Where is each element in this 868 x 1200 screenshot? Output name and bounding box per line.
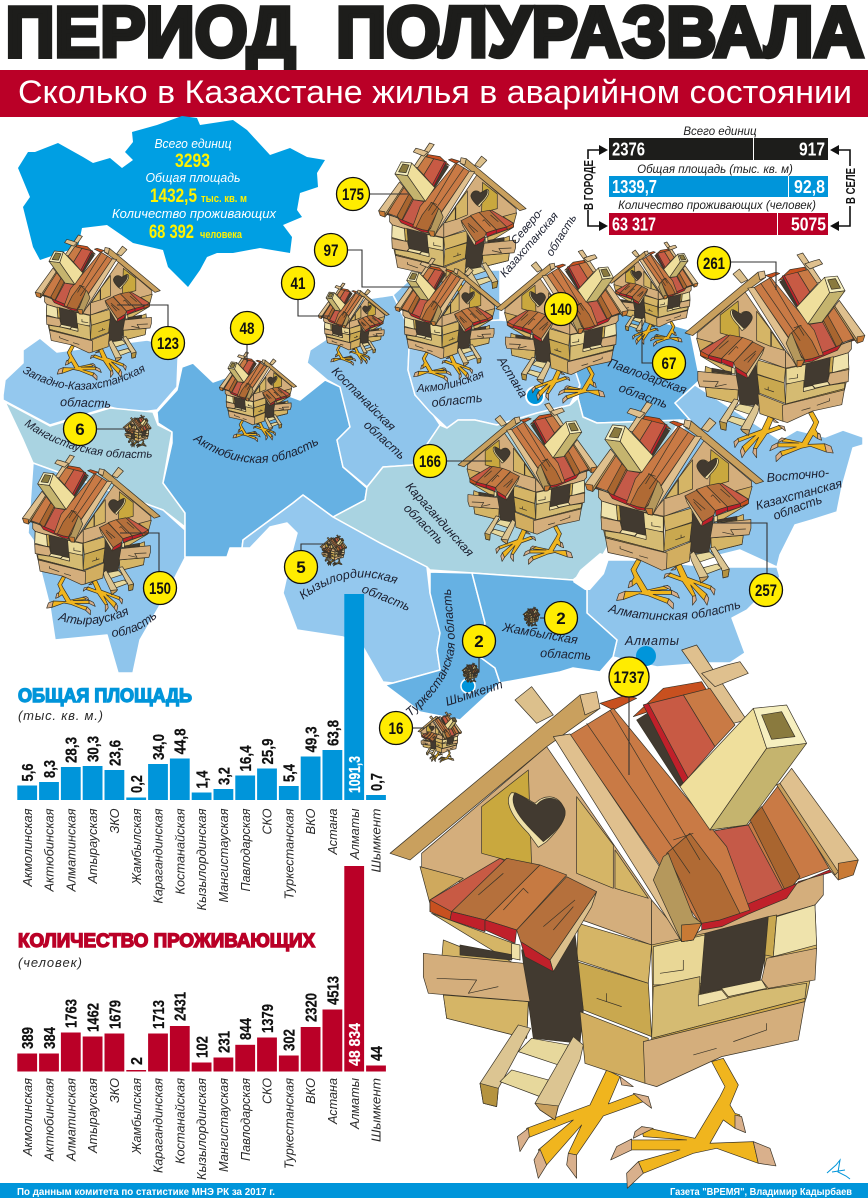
house: Mangystau 6 <box>64 412 151 448</box>
map labels: область <box>360 582 412 614</box>
values: residents: 231 <box>216 1031 233 1053</box>
house: Kostanay 41 <box>282 266 389 365</box>
heading: total area: ОБЩАЯ ПЛОЩАДЬ <box>18 686 192 707</box>
values: total area: 34,0 <box>151 734 168 760</box>
panel: national totals on blue map: 1432,5 <box>150 186 197 207</box>
values: residents: 1679 <box>107 1000 124 1029</box>
region labels: residents: Акмолинская <box>20 1078 35 1157</box>
house: Astana 140 <box>496 250 628 403</box>
region labels: residents <box>20 1078 384 1180</box>
panel: city vs village table: 92,8 <box>794 177 825 197</box>
panel: city vs village table: 63 317 <box>612 214 656 234</box>
region labels: total area: Костанайская <box>172 808 187 894</box>
values: total area <box>20 720 386 793</box>
house: Shymkent 16: 16 <box>388 719 404 738</box>
panel: city vs village table: 5075 <box>791 214 826 234</box>
values: residents: 2 <box>129 1057 146 1065</box>
house: Astana 140: 140 <box>550 300 572 319</box>
panel: national totals on blue map: Общая площадь <box>146 170 241 185</box>
icon: artist signature <box>827 1160 850 1179</box>
values: total area: 3,2 <box>216 767 233 785</box>
arrows: in village: В СЕЛЕ <box>843 168 858 204</box>
map labels: область <box>361 418 408 462</box>
values: residents: 4513 <box>325 976 342 1005</box>
region labels: residents: Туркестанская <box>281 1078 296 1169</box>
values: total area: 63,8 <box>325 720 342 746</box>
values: total area: 5,4 <box>282 764 299 782</box>
map labels: Астана <box>494 353 530 400</box>
region labels: total area: Павлодарская <box>238 808 253 892</box>
values: total area: 49,3 <box>304 726 320 752</box>
heading: residents: КОЛИЧЕСТВО ПРОЖИВАЮЩИХ <box>18 931 315 952</box>
panel: national totals on blue map: Всего единиц <box>154 136 232 151</box>
house: Pavlodar 67: 67 <box>662 354 676 373</box>
subtitle banner: Сколько в Казахстане жилья в аварийном состоянии <box>18 74 852 110</box>
map labels: Западно-Казахстанская <box>23 366 145 390</box>
marker: Shymkent <box>461 679 475 693</box>
panel: city vs village table: Общая площадь (тыс. кв. м) <box>637 164 793 176</box>
map labels: Жамбылская <box>500 620 579 647</box>
house: North Kazakhstan 175 <box>336 143 526 314</box>
values: residents: 1462 <box>86 1003 102 1032</box>
unit: total area: (тыс. кв. м.) <box>18 708 103 723</box>
region labels: residents: Шымкент <box>369 1078 384 1142</box>
panel: national totals on blue map: 68 392 <box>149 222 194 243</box>
map labels: Мангистауская область <box>24 420 152 458</box>
region labels: residents: ВКО <box>303 1078 318 1104</box>
region labels: total area: ЗКО <box>107 808 122 834</box>
panel: city vs village table <box>581 126 858 235</box>
house: Karaganda 166 <box>414 403 597 564</box>
values: residents: 1763 <box>64 999 81 1028</box>
map labels: Костанайская <box>329 364 399 434</box>
map labels: Актюбинская область <box>192 436 318 464</box>
region labels: total area: Актюбинская <box>42 808 57 892</box>
panel: national totals on blue map <box>18 116 325 287</box>
region labels: total area: Кызылординская <box>194 808 209 910</box>
values: residents: 2431 <box>173 992 190 1021</box>
house: Almaty region 257: 257 <box>755 581 777 600</box>
region labels: residents: Атырауская <box>85 1078 100 1154</box>
values: residents: 1713 <box>151 1000 168 1029</box>
values: residents: 44 <box>369 1046 386 1061</box>
house: Akmola 97 <box>314 234 502 382</box>
house: Kyzylorda 5 <box>284 535 347 584</box>
title <box>6 0 864 72</box>
region labels: total area <box>20 808 384 910</box>
values: residents: 48 834 <box>347 1023 364 1066</box>
footer bar: По данным комитета по статистике МНЭ РК за 2017 г. <box>17 1186 275 1198</box>
values: total area: 1091,3 <box>347 756 364 793</box>
house: West Kazakhstan 123: 123 <box>157 334 179 353</box>
map labels: область <box>431 391 483 410</box>
house: Pavlodar 67 <box>608 242 698 380</box>
values: residents: 384 <box>42 1027 59 1049</box>
region labels: total area: СКО <box>260 808 275 834</box>
house: East Kazakhstan 261 <box>685 246 865 462</box>
region labels: residents: Карагандинская <box>151 1078 166 1173</box>
house: Aktobe 48: 48 <box>240 319 254 338</box>
panel: city vs village table: Количество проживающих (человек) <box>618 200 816 212</box>
values: residents: 1379 <box>260 1004 277 1033</box>
panel: city vs village table: 917 <box>799 140 825 160</box>
region labels: total area: Карагандинская <box>151 808 166 904</box>
map labels: область <box>60 395 111 411</box>
bars: residents <box>17 866 386 1072</box>
region labels: total area: Алматинская <box>63 808 78 892</box>
panel: city vs village table: 1339,7 <box>612 177 657 197</box>
arrows: in city: В ГОРОДЕ <box>581 160 596 210</box>
values: total area: 25,9 <box>260 738 277 764</box>
values: total area: 5,6 <box>20 763 37 782</box>
house: Akmola 97: 97 <box>324 241 338 260</box>
house: Turkestan 2: 2 <box>474 632 484 651</box>
map labels: Акмолинская <box>416 371 484 392</box>
map labels: Туркестанская область <box>406 590 455 716</box>
region labels: residents: Костанайская <box>172 1078 187 1164</box>
values: total area: 0,2 <box>129 775 146 793</box>
region labels: total area: Алматы <box>347 808 362 860</box>
map labels: Кызылординская <box>300 568 398 600</box>
panel: national totals on blue map: тыс. кв. м <box>201 193 247 205</box>
region labels: total area: Туркестанская <box>281 808 296 900</box>
values: residents <box>20 976 386 1066</box>
region labels: residents: Алматинская <box>63 1078 78 1162</box>
map labels: Атырауская <box>58 608 128 627</box>
house: Mangystau 6: 6 <box>75 420 85 439</box>
values: total area: 28,3 <box>64 737 81 763</box>
map labels: Алматинская область <box>608 602 740 620</box>
values: residents: 302 <box>282 1029 299 1051</box>
map of Kazakhstan regions <box>3 270 863 720</box>
map labels: Восточно- <box>766 466 830 485</box>
house: Kyzylorda 5: 5 <box>296 558 306 577</box>
region labels: residents: Алматы <box>347 1078 362 1130</box>
panel: city vs village table: Всего единиц <box>683 126 757 138</box>
house: West Kazakhstan 123 <box>35 235 185 380</box>
panel: national totals on blue map: человека <box>200 229 243 241</box>
house: Atyrau 150 <box>22 455 176 615</box>
region labels: total area: Акмолинская <box>20 808 35 887</box>
region labels: total area: ВКО <box>303 808 318 834</box>
map labels <box>23 206 844 760</box>
map labels: Шымкент <box>444 677 504 709</box>
values: total area: 0,7 <box>369 773 386 791</box>
region labels: total area: Мангистауская <box>216 808 231 902</box>
region labels: residents: Астана <box>325 1078 340 1125</box>
footer bar <box>0 1183 868 1198</box>
map labels: область <box>544 212 579 259</box>
region labels: total area: Астана <box>325 808 340 855</box>
region labels: residents: Жамбылская <box>129 1078 144 1155</box>
map labels: область <box>617 381 670 411</box>
house: Zhambyl 2 <box>523 602 578 634</box>
values: residents: 844 <box>238 1018 255 1040</box>
values: total area: 44,8 <box>173 728 190 754</box>
bars: total area <box>17 594 386 800</box>
values: total area: 8,3 <box>42 760 59 778</box>
house: North Kazakhstan 175: 175 <box>342 185 364 204</box>
house: Zhambyl 2: 2 <box>556 609 566 628</box>
house: Aktobe 48 <box>219 312 297 442</box>
values: total area: 16,4 <box>238 745 255 772</box>
region labels: residents: Актюбинская <box>42 1078 57 1162</box>
marker: Almaty <box>636 646 656 666</box>
region labels: residents: СКО <box>260 1078 275 1104</box>
panel: national totals on blue map: 3293 <box>175 151 210 172</box>
arrows: in village <box>830 145 858 231</box>
panel: city vs village table: 2376 <box>612 140 645 160</box>
map labels: Карагандинская <box>403 480 477 560</box>
chart: total area <box>17 594 386 910</box>
values: total area: 23,6 <box>107 740 124 766</box>
map labels: Павлодарская <box>606 356 689 397</box>
values: residents: 102 <box>194 1036 212 1058</box>
marker: Astana <box>526 387 544 405</box>
map labels: область <box>401 501 447 547</box>
map labels: область <box>771 492 824 523</box>
map labels: Северо- <box>509 206 546 247</box>
values: total area: 1,4 <box>194 770 212 788</box>
region labels: residents: Павлодарская <box>238 1078 253 1161</box>
region labels: residents: Мангистауская <box>216 1078 231 1172</box>
house: Almaty region 257 <box>585 402 782 609</box>
values: residents: 389 <box>20 1027 37 1049</box>
house: Almaty city 1737: 1737 <box>614 668 644 687</box>
values: residents: 2320 <box>304 993 320 1022</box>
region labels: residents: ЗКО <box>107 1078 122 1103</box>
map labels: Казахстанская <box>754 476 844 513</box>
chart: residents <box>17 866 386 1180</box>
map labels: Алматы <box>624 634 679 648</box>
region labels: residents: Кызылординская <box>194 1078 209 1180</box>
region labels: total area: Жамбылская <box>129 808 144 885</box>
region labels: total area: Шымкент <box>369 808 384 872</box>
house: Almaty city 1737 <box>390 645 858 1188</box>
values: total area: 30,3 <box>86 736 102 762</box>
house: East Kazakhstan 261: 261 <box>703 254 725 273</box>
map labels: Казахстанская <box>498 210 561 280</box>
arrows: in city <box>581 145 608 231</box>
subtitle banner <box>0 70 868 117</box>
house: Shymkent 16 <box>380 712 462 763</box>
panel: national totals on blue map: Количество проживающих <box>112 206 277 221</box>
map labels: область <box>112 614 156 637</box>
house: Atyrau 150: 150 <box>149 579 171 598</box>
region labels: total area: Атырауская <box>85 808 100 884</box>
house: Turkestan 2 <box>462 624 496 683</box>
house: Karaganda 166: 166 <box>419 452 441 471</box>
map labels: область <box>540 646 591 663</box>
house: Kostanay 41: 41 <box>290 274 306 293</box>
unit: residents: (человек) <box>18 955 82 970</box>
